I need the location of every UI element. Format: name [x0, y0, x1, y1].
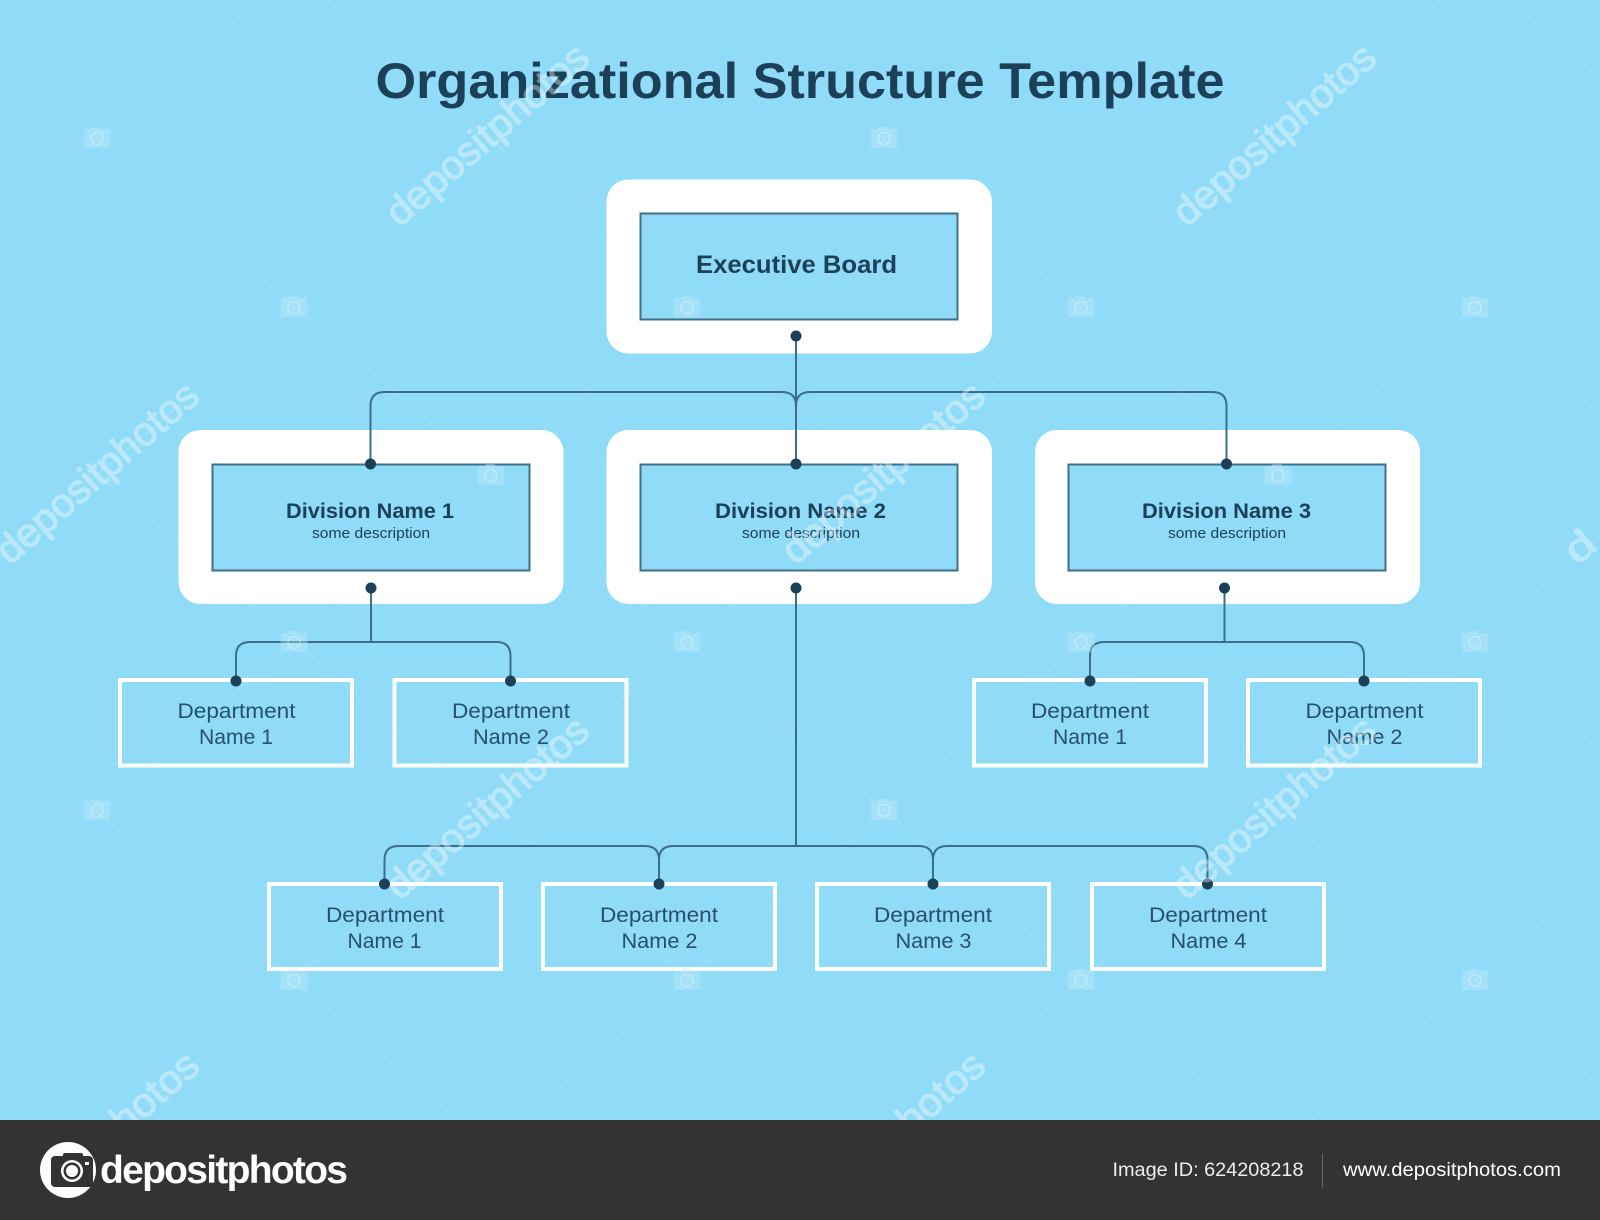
- department box: left 1: [120, 680, 352, 766]
- description: division 2: some description: [742, 525, 860, 542]
- icon: camera logo: [40, 1142, 96, 1198]
- watermark: diagonal logos: d: [1555, 521, 1600, 573]
- department box: bottom 4: [1092, 884, 1324, 969]
- department box: bottom 2: Name 2: [622, 930, 698, 953]
- department box: right 2: [1248, 680, 1480, 766]
- panel: division 1: [178, 430, 564, 604]
- department box: right 1: Name 1: [1053, 726, 1127, 749]
- panel: executive board: [606, 180, 992, 354]
- logo wordmark: depositphotos: [100, 1149, 348, 1192]
- watermark: diagonal logos: depositphotos: [1164, 708, 1385, 908]
- department box: bottom 2: [543, 884, 775, 969]
- watermark: diagonal logos: depositphotos: [1164, 35, 1385, 235]
- department box: bottom 1: Department: [326, 904, 444, 927]
- heading: division 3: Division Name 3: [1142, 500, 1311, 523]
- panel: division 2: [606, 430, 992, 604]
- heading: executive board: Executive Board: [696, 251, 897, 279]
- watermark: diagonal logos: depositphotos: [773, 373, 994, 573]
- department box: left 2: Department: [452, 700, 570, 723]
- department box: left 1: Department: [178, 700, 296, 723]
- watermark: diagonal logos: hotos: [102, 1043, 208, 1143]
- heading: division 2: Division Name 2: [715, 500, 886, 523]
- department box: bottom 2: Department: [600, 904, 718, 927]
- department box: bottom 3: [817, 884, 1049, 969]
- watermark: camera icons: [84, 127, 1488, 990]
- department box: left 2: [394, 680, 626, 766]
- department box: bottom 3: Name 3: [896, 930, 972, 953]
- website url: www.depositphotos.com: [1342, 1159, 1561, 1181]
- description: division 3: some description: [1168, 525, 1286, 542]
- connector lines: [236, 336, 1364, 884]
- department box: bottom 4: Department: [1149, 904, 1267, 927]
- watermark: diagonal logos: hotos: [888, 1043, 994, 1143]
- footer bar: [0, 1120, 1600, 1220]
- department box: right 2: Name 2: [1326, 726, 1402, 749]
- image id: Image ID: 624208218: [1112, 1159, 1304, 1181]
- title: Organizational Structure Template: [376, 53, 1224, 109]
- department box: bottom 4: Name 4: [1170, 930, 1247, 953]
- department box: left 2: Name 2: [473, 726, 549, 749]
- department box: right 1: [974, 680, 1206, 766]
- department box: bottom 3: Department: [874, 904, 992, 927]
- department box: bottom 1: [269, 884, 501, 969]
- description: division 1: some description: [312, 525, 430, 542]
- department box: bottom 1: Name 1: [348, 930, 422, 953]
- department box: left 1: Name 1: [199, 726, 273, 749]
- watermark: diagonal logos: depositphotos: [377, 35, 598, 235]
- department box: right 1: Department: [1031, 700, 1149, 723]
- department box: right 2: Department: [1306, 700, 1424, 723]
- panel: division 3: [1035, 430, 1420, 604]
- heading: division 1: Division Name 1: [286, 500, 454, 523]
- connector dots: [230, 330, 1370, 890]
- watermark: diagonal logos: depositphotos: [377, 708, 598, 908]
